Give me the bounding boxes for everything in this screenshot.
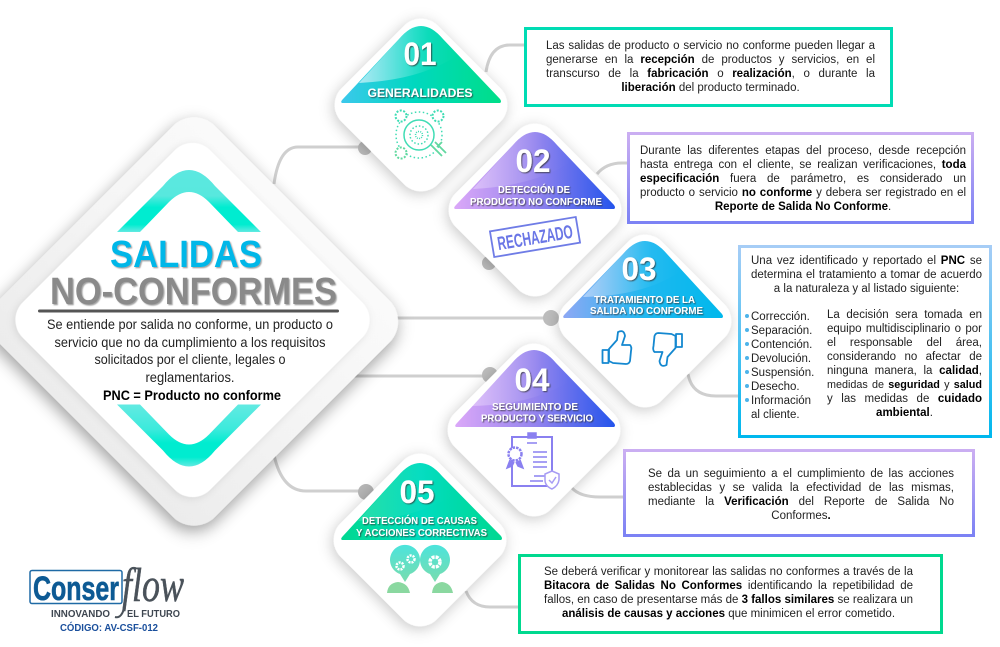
main diamond panel <box>0 105 410 538</box>
text box 4: establecidas y se valida la efectividad de las mismas, <box>648 482 954 494</box>
step 04 diamond <box>438 334 630 526</box>
step 02 diamond <box>439 114 631 306</box>
label deteccion de producto <box>470 183 602 208</box>
top teal chevron <box>117 170 261 232</box>
definition text: Se entiende por salida no conforme, un producto o <box>47 316 333 332</box>
text box 5: fallos, en caso de presentarse más de 3 fallos similares se realizara un <box>544 594 913 606</box>
connectors <box>274 45 740 607</box>
treatment list <box>745 311 814 421</box>
logo conserflow: Conser <box>33 570 119 608</box>
definition text: reglamentarios. <box>146 369 234 385</box>
bottom teal chevron <box>117 404 261 466</box>
decision paragraph: ambiental. <box>876 407 933 419</box>
label seguimiento <box>481 401 593 424</box>
treatment list: Contención. <box>751 339 812 351</box>
number 05: 05 <box>400 474 434 510</box>
step 01 diamond <box>325 9 517 201</box>
number 01: 01 <box>404 36 436 72</box>
definition text <box>47 316 333 403</box>
logo conserflow <box>30 559 184 634</box>
decision paragraph <box>827 309 982 419</box>
text box 2: producto o servicio no conforme y debera ser registrado en el <box>640 187 966 199</box>
text box 3 <box>738 245 992 438</box>
label tratamiento <box>590 294 703 317</box>
treatment list: al cliente. <box>751 409 800 421</box>
label deteccion de causas: DETECCIÓN DE CAUSAS <box>362 514 477 527</box>
decision paragraph: considerando no afectar de <box>827 351 982 363</box>
decision paragraph: equipo multidisciplinario o por <box>827 323 982 335</box>
text box 1: generarse en la recepción de productos y servicios, en el <box>546 54 875 66</box>
step 05 diamond <box>324 444 516 636</box>
intro paragraph: determina el tratamiento a tomar de acuerdo <box>751 269 982 281</box>
definition text: solicitados por el cliente, legales o <box>94 351 286 367</box>
decision paragraph: y las medidas de cuidado <box>827 393 982 405</box>
text box 4: Conformes. <box>771 510 831 522</box>
treatment list: Separación. <box>751 325 812 337</box>
text box 4: Se da un seguimiento a el cumplimiento de las acciones <box>648 468 954 480</box>
text box 5: Se deberá verificar y monitorear las salidas no conformes a través de la <box>544 566 913 578</box>
label deteccion de producto: DETECCIÓN DE <box>498 183 570 196</box>
text box 2 <box>627 132 974 224</box>
label deteccion de producto: PRODUCTO NO CONFORME <box>470 196 602 208</box>
label generalidades: GENERALIDADES <box>368 86 472 100</box>
label seguimiento: PRODUCTO Y SERVICIO <box>481 412 593 424</box>
text box 1: transcurso de la fabricación o realización, o durante la <box>546 68 875 80</box>
step 03 diamond <box>549 225 741 417</box>
text box 5 <box>518 554 943 634</box>
label deteccion de causas <box>356 514 487 539</box>
decision paragraph: el responsable del área, <box>827 337 982 349</box>
decision paragraph: La decisión sera tomada en <box>827 309 982 321</box>
text box 5: Bitacora de Salidas No Conformes identificando la repetibilidad de <box>544 580 913 592</box>
text box 5: análisis de causas y acciones que minimicen el error cometido. <box>562 608 895 620</box>
icon: rechazado stamp <box>490 217 580 257</box>
icon: rechazado stamp: RECHAZADO <box>496 222 574 255</box>
treatment list: Corrección. <box>751 311 810 323</box>
decision paragraph: ninguna manera, la calidad, <box>827 365 982 377</box>
text box 4: mediante la Verificación del Reporte de Salida No <box>648 496 954 508</box>
label tratamiento: SALIDA NO CONFORME <box>590 305 703 317</box>
decision paragraph: medidas de seguridad y salud <box>827 379 982 391</box>
icon: certified document <box>507 433 559 489</box>
text box 1 <box>524 27 893 107</box>
label seguimiento: SEGUIMIENTO DE <box>492 401 578 413</box>
treatment list: Desecho. <box>751 381 800 393</box>
title: no-conformes: NO-CONFORMES <box>50 271 337 313</box>
text box 1: liberación del producto terminado. <box>621 82 800 94</box>
treatment list: Devolución. <box>751 353 811 365</box>
text box 2: especificación fuera de parámetro, es considerado un <box>640 173 966 185</box>
definition text: PNC = Producto no conforme <box>103 387 281 403</box>
title underline <box>38 310 339 312</box>
logo conserflow: CÓDIGO: AV-CSF-012 <box>60 621 158 634</box>
icon: people with gears <box>387 545 453 593</box>
text box 2: hasta entrega con el cliente, se realizan verificaciones, toda <box>640 159 966 171</box>
definition text: servicio que no da cumplimiento a los requisitos <box>54 334 326 350</box>
logo conserflow: INNOVANDO <box>51 609 110 620</box>
logo conserflow: flow <box>122 559 184 612</box>
treatment list: Información <box>751 395 811 407</box>
text box 2: Reporte de Salida No Conforme. <box>715 201 891 213</box>
number 04: 04 <box>514 362 550 398</box>
intro paragraph <box>751 255 982 295</box>
title: salidas: SALIDAS <box>110 234 262 276</box>
icon: thumb up <box>602 331 631 364</box>
treatment list: Suspensión. <box>751 367 814 379</box>
intro paragraph: a la naturaleza y al listado siguiente: <box>774 283 959 295</box>
logo conserflow: EL FUTURO <box>127 609 180 620</box>
icon: magnifier and gears <box>396 110 446 158</box>
number 02: 02 <box>516 143 550 179</box>
icon: thumb down <box>653 333 682 366</box>
label tratamiento: TRATAMIENTO DE LA <box>594 294 695 306</box>
number 03: 03 <box>622 251 656 287</box>
intro paragraph: Una vez identificado y reportado el PNC se <box>751 255 982 267</box>
label deteccion de causas: Y ACCIONES CORRECTIVAS <box>356 527 487 539</box>
text box 1: Las salidas de producto o servicio no conforme pueden llegar a <box>546 40 875 52</box>
text box 4 <box>623 449 975 537</box>
text box 2: Durante las diferentes etapas del proceso, desde recepción <box>640 145 966 157</box>
